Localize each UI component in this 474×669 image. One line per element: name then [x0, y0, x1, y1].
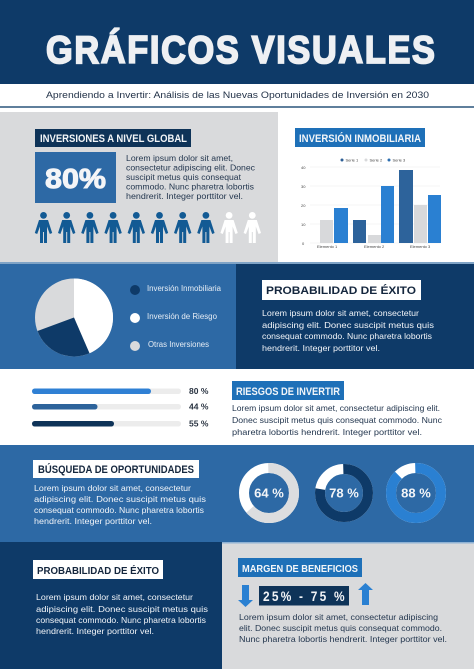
heading: inversión inmobiliaria: INVERSIÓN INMOBILIARIA — [299, 132, 421, 145]
heading: inversiones a nivel global — [35, 129, 191, 147]
progress bars — [32, 386, 209, 428]
panel: margen de beneficios — [222, 542, 474, 669]
text block: búsqueda: adipiscing elit. Donec suscipit metus quis — [34, 494, 206, 504]
legend: pie — [130, 284, 222, 351]
progress bars: 80 % — [189, 386, 209, 396]
text block: global: suscipit metus quis consequat — [126, 172, 242, 182]
panel: inversión inmobiliaria — [278, 112, 474, 262]
text block: margen: Nunc pharetra lobortis hendrerit. Integer porttitor vel. — [239, 634, 447, 644]
legend: pie: Otras Inversiones — [148, 340, 209, 349]
text block: riesgos: Lorem ipsum dolor sit amet, consectetur adipiscing elit. — [232, 403, 440, 413]
pictogram: 8 of 10 people — [35, 212, 261, 243]
panel: pie chart — [0, 264, 236, 369]
bar chart: Elemento 3 — [410, 244, 431, 249]
text block: búsqueda: hendrerit. Integer porttitor vel. — [34, 516, 152, 526]
heading: probabilidad de éxito — [33, 560, 163, 579]
legend: pie: Inversión Inmobiliaria — [147, 284, 222, 293]
bar chart: Serie 1 — [346, 158, 359, 162]
bar chart: 30 — [301, 184, 306, 189]
icon: down arrow — [238, 585, 253, 607]
text block: margen — [239, 612, 447, 644]
bar chart: Serie 3 — [392, 158, 406, 162]
donut: 88%: 88 % — [401, 486, 431, 500]
bar chart: 10 — [301, 222, 306, 227]
text block: probabilidad — [36, 592, 208, 636]
heading: riesgos de invertir — [232, 381, 344, 400]
progress bars: 44 % — [189, 402, 209, 412]
bar chart: Elemento 1 — [317, 244, 338, 249]
text block: probabilidad: Lorem ipsum dolor sit amet, consectetur — [262, 308, 419, 318]
donut: 78%: 78 % — [329, 486, 359, 500]
heading: margen de beneficios: MARGEN DE BENEFICIOS — [242, 563, 358, 575]
text block: probabilidad — [262, 308, 434, 353]
stat: 80%: 80% — [45, 163, 106, 194]
text block: riesgos — [232, 403, 443, 437]
text block: probabilidad: adipiscing elit. Donec suscipit metus quis — [262, 320, 434, 330]
text block: global: consectetur adipiscing elit. Donec — [126, 162, 256, 172]
panel: inversiones a nivel global — [0, 112, 278, 262]
subtitle band — [0, 84, 474, 106]
heading: probabilidad de éxito: PROBABILIDAD DE ÉXITO — [37, 564, 159, 577]
donut: 78% — [320, 469, 368, 517]
pie chart — [35, 278, 113, 356]
text block: margen: Lorem ipsum dolor sit amet, consectetur adipiscing — [239, 612, 438, 622]
panel: riesgos — [0, 369, 474, 445]
header banner — [0, 0, 474, 84]
panel: búsqueda de oportunidades — [0, 445, 474, 542]
progress bars: 55 % — [189, 418, 209, 428]
donut: 88% — [391, 468, 441, 518]
panel: probabilidad de éxito (bottom) — [0, 542, 222, 669]
title: GRÁFICOS VISUALES — [46, 28, 435, 71]
bar chart: Elemento 2 — [364, 244, 385, 249]
heading: búsqueda de oportunidades: BÚSQUEDA DE OPORTUNIDADES — [38, 463, 194, 476]
heading: inversiones a nivel global: INVERSIONES A NIVEL GLOBAL — [40, 133, 187, 145]
stat: 80% — [35, 152, 116, 203]
text block: búsqueda — [34, 483, 206, 526]
bar chart: 20 — [301, 203, 306, 208]
bar chart: 0 — [302, 241, 305, 246]
bar chart: Serie 2 — [370, 158, 383, 162]
stat: 25% - 75%: 25% - 75 % — [263, 588, 345, 604]
icon: up arrow — [358, 583, 373, 605]
donut: 64% — [244, 468, 294, 518]
bar chart — [301, 158, 441, 249]
heading: probabilidad de éxito — [262, 280, 421, 300]
panel: probabilidad de éxito (top) — [236, 264, 474, 369]
subtitle band: Aprendiendo a Invertir: Análisis de las Nuevas Oportunidades de Inversión en 2030 — [46, 90, 429, 101]
heading: riesgos de invertir: RIESGOS DE INVERTIR — [236, 386, 340, 398]
heading: búsqueda de oportunidades — [33, 460, 199, 478]
text block: probabilidad: consequat commodo. Nunc pharetra lobortis — [36, 615, 206, 625]
text block: probabilidad: consequat commodo. Nunc pharetra lobortis — [262, 331, 432, 341]
text block: global: Lorem ipsum dolor sit amet, — [126, 153, 233, 163]
legend: pie: Inversión de Riesgo — [147, 312, 218, 321]
text block: margen: elit. Donec suscipit metus quis consequat commodo. — [239, 623, 442, 633]
text block: global — [126, 153, 256, 201]
heading: inversión inmobiliaria — [295, 128, 425, 147]
text block: probabilidad: hendrerit. Integer porttitor vel. — [262, 343, 380, 353]
text block: búsqueda: Lorem ipsum dolor sit amet, consectetur — [34, 483, 191, 493]
text block: probabilidad: Lorem ipsum dolor sit amet, consectetur — [36, 592, 193, 602]
text block: probabilidad: adipiscing elit. Donec suscipit metus quis — [36, 604, 208, 614]
text block: global: hendrerit. Integer porttitor vel. — [126, 191, 243, 201]
text block: probabilidad: hendrerit. Integer porttitor vel. — [36, 626, 154, 636]
donut: 64%: 64 % — [254, 486, 284, 500]
text block: riesgos: Donec suscipit metus quis consequat commodo. Nunc — [232, 415, 443, 425]
heading: probabilidad de éxito: PROBABILIDAD DE ÉXITO — [266, 284, 416, 297]
text block: global: commodo. Nunc pharetra lobortis — [126, 182, 254, 192]
text block: búsqueda: consequat commodo. Nunc pharetra lobortis — [34, 505, 204, 515]
heading: margen de beneficios — [238, 558, 362, 577]
text block: riesgos: pharetra lobortis hendrerit. Integer porttitor vel. — [232, 427, 422, 437]
bar chart: 40 — [301, 165, 306, 170]
